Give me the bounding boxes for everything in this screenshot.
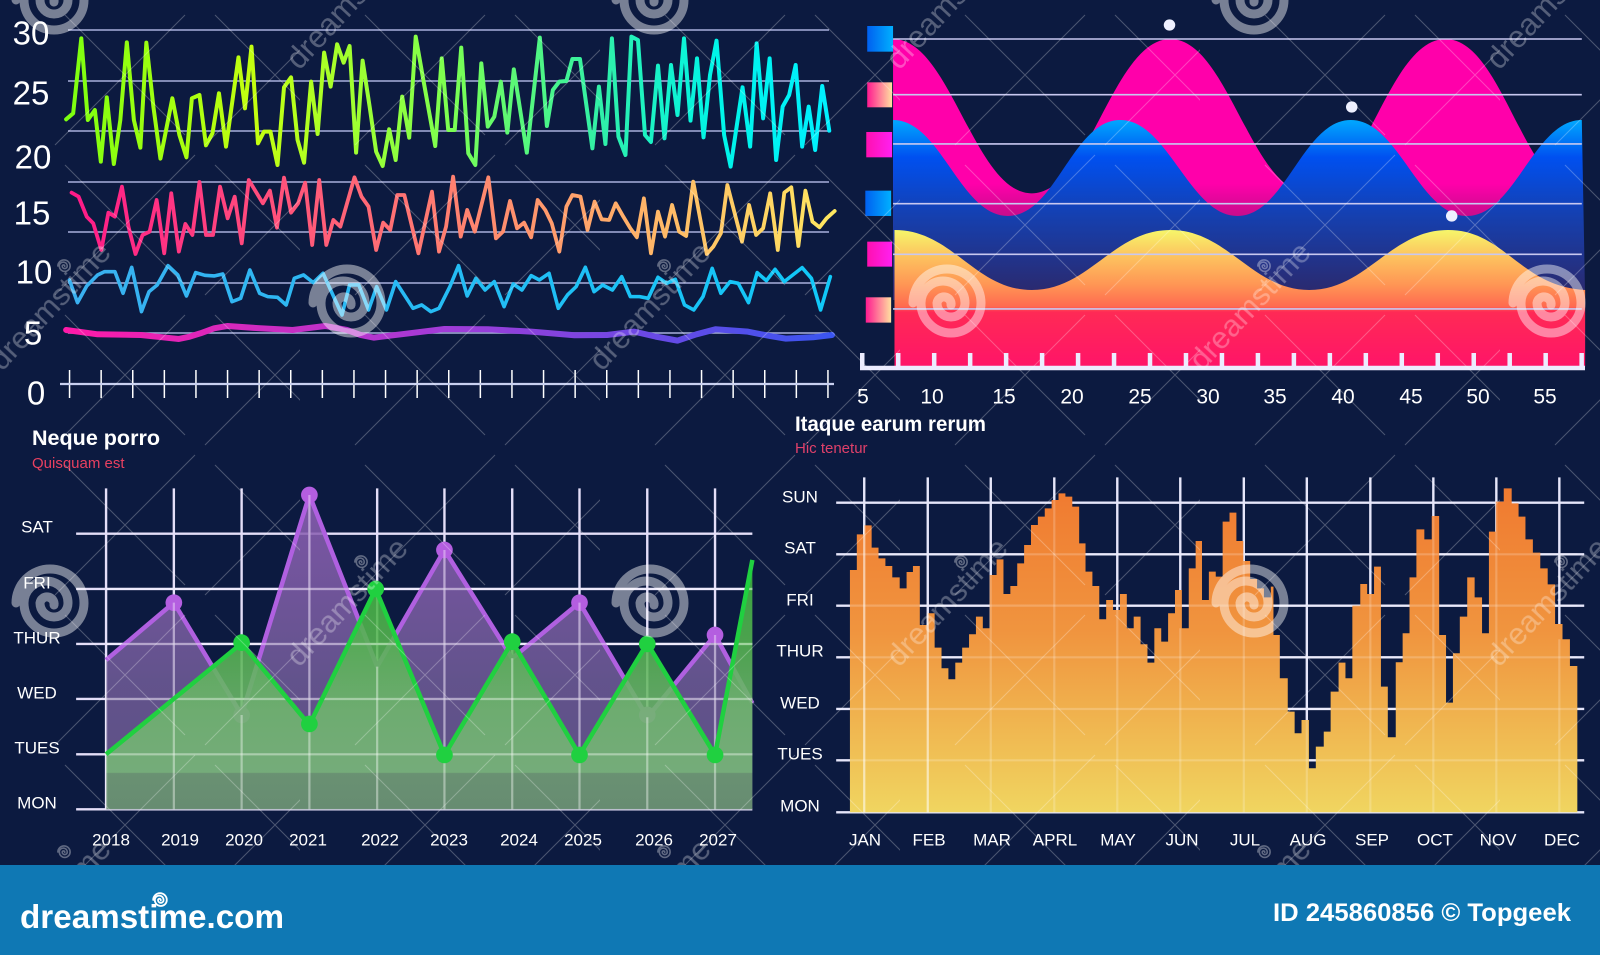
- wave: blue: [893, 120, 1585, 300]
- heading: Itaque earum rerum: [795, 413, 986, 436]
- y-axis labels: [776, 488, 824, 816]
- y-axis labels: THUR: [776, 642, 824, 660]
- panel: multi-line chart (top left): [13, 14, 835, 412]
- watermark overlay: dreamstime: [279, 531, 415, 673]
- y-axis labels: MON: [17, 794, 57, 812]
- y-axis labels: [13, 518, 61, 812]
- wave: yellow to red: [894, 230, 1585, 367]
- x-axis labels: 15: [992, 386, 1016, 408]
- x-axis labels: AUG: [1290, 830, 1326, 850]
- panel: wave area chart (top right): [857, 19, 1586, 409]
- y-axis labels: FRI: [786, 590, 814, 610]
- x-axis with ticks: [60, 370, 834, 398]
- subheading: Hic tenetur: [795, 440, 868, 457]
- data dots: [1164, 19, 1457, 222]
- x-axis labels: 2021: [289, 830, 327, 850]
- x-axis labels: NOV: [1480, 830, 1517, 850]
- x-axis labels: 10: [920, 386, 944, 408]
- y-axis labels: TUES: [14, 738, 60, 758]
- x-axis labels: [849, 830, 1580, 850]
- watermark overlay: dreamstime: [582, 235, 718, 377]
- x-axis labels: [857, 386, 1557, 408]
- x-axis labels: JUL: [1230, 830, 1260, 850]
- y-axis labels: MON: [780, 796, 820, 816]
- x-axis labels: 55: [1533, 386, 1557, 408]
- y-axis labels: [13, 14, 52, 412]
- legend swatches: [865, 26, 893, 323]
- x-axis labels: [92, 830, 737, 850]
- y-axis labels: SAT: [784, 538, 816, 558]
- y-axis labels: WED: [17, 684, 57, 702]
- watermark overlay: dreamstime: [879, 531, 1015, 673]
- line: pink to yellow series: [72, 177, 835, 254]
- x-axis labels: 30: [1196, 386, 1220, 408]
- line: blue series: [69, 266, 830, 315]
- x-axis with ticks: [860, 360, 1586, 368]
- x-axis labels: 25: [1128, 386, 1152, 408]
- y-axis labels: SAT: [21, 518, 53, 536]
- footer logo: dreamstime.com: [20, 898, 284, 935]
- x-axis labels: 2024: [500, 830, 538, 850]
- line: magenta to indigo series: [66, 326, 832, 341]
- x-axis labels: MAR: [973, 830, 1011, 850]
- x-axis labels: 2026: [635, 830, 673, 850]
- panel: Neque porro area chart (bottom left): [13, 427, 752, 850]
- y-axis labels: TUES: [777, 744, 823, 764]
- x-axis labels: 5: [857, 386, 869, 408]
- y-axis labels: 5: [24, 314, 42, 352]
- x-axis labels: 45: [1399, 386, 1423, 408]
- x-axis labels: JUN: [1165, 830, 1199, 850]
- line: green to cyan series: [66, 37, 829, 167]
- y-axis labels: FRI: [23, 574, 51, 592]
- x-axis labels: 40: [1331, 386, 1355, 408]
- x-axis labels: APRL: [1033, 830, 1077, 850]
- y-axis labels: 30: [13, 14, 49, 52]
- image credit: ID 245860856 © Topgeek: [1273, 899, 1571, 927]
- footer bar: [0, 865, 1600, 955]
- y-axis labels: THUR: [13, 628, 61, 648]
- y-axis labels: SUN: [782, 488, 818, 506]
- x-axis labels: 2018: [92, 830, 130, 850]
- x-axis labels: 50: [1466, 386, 1490, 408]
- stepped area series: [850, 488, 1577, 812]
- x-axis labels: 2020: [225, 830, 263, 850]
- x-axis labels: SEP: [1355, 830, 1389, 850]
- x-axis labels: 2023: [430, 830, 468, 850]
- x-axis labels: FEB: [912, 830, 946, 850]
- y-axis labels: 10: [16, 254, 52, 290]
- subheading: Quisquam est: [32, 455, 125, 472]
- y-axis labels: 15: [14, 194, 50, 232]
- x-axis labels: 2027: [699, 830, 737, 850]
- x-axis labels: MAY: [1100, 830, 1136, 850]
- y-axis labels: 25: [13, 74, 49, 112]
- x-axis labels: 2025: [564, 830, 602, 850]
- y-axis labels: WED: [780, 694, 820, 712]
- x-axis labels: OCT: [1417, 830, 1453, 850]
- area: purple series: [106, 487, 752, 809]
- x-axis labels: JAN: [849, 830, 881, 850]
- x-axis labels: 2022: [361, 830, 399, 850]
- x-axis labels: DEC: [1544, 830, 1580, 850]
- area: green series: [106, 495, 752, 809]
- heading: Neque porro: [32, 427, 160, 450]
- panel: Itaque earum rerum step chart (bottom right): [776, 413, 1584, 850]
- x-axis labels: 2019: [161, 830, 199, 850]
- y-axis labels: 0: [27, 374, 45, 412]
- wave: magenta: [893, 39, 1582, 300]
- watermark overlay: dreamstime: [1182, 235, 1318, 377]
- x-axis labels: 35: [1263, 386, 1287, 408]
- y-axis labels: 20: [15, 138, 51, 176]
- x-axis labels: 20: [1060, 386, 1084, 408]
